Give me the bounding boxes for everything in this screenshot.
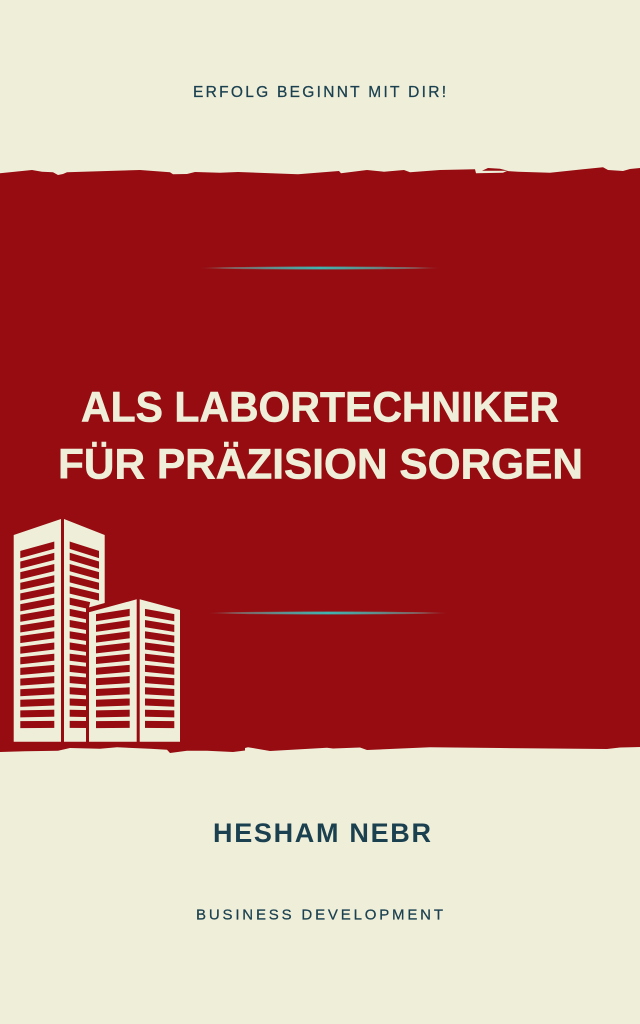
torn edge sliver	[482, 168, 508, 171]
top tagline: ERFOLG BEGINNT MIT DIR!	[193, 84, 446, 101]
title: FÜR PRÄZISION SORGEN	[58, 442, 583, 489]
title: ALS LABORTECHNIKER	[81, 385, 559, 432]
icon: office buildings	[14, 519, 180, 742]
title	[58, 385, 583, 489]
lower accent line	[208, 612, 448, 614]
author name: HESHAM NEBR	[213, 818, 431, 848]
subtitle: BUSINESS DEVELOPMENT	[196, 906, 443, 923]
red torn-edge band	[0, 167, 640, 753]
upper accent line	[200, 267, 440, 269]
